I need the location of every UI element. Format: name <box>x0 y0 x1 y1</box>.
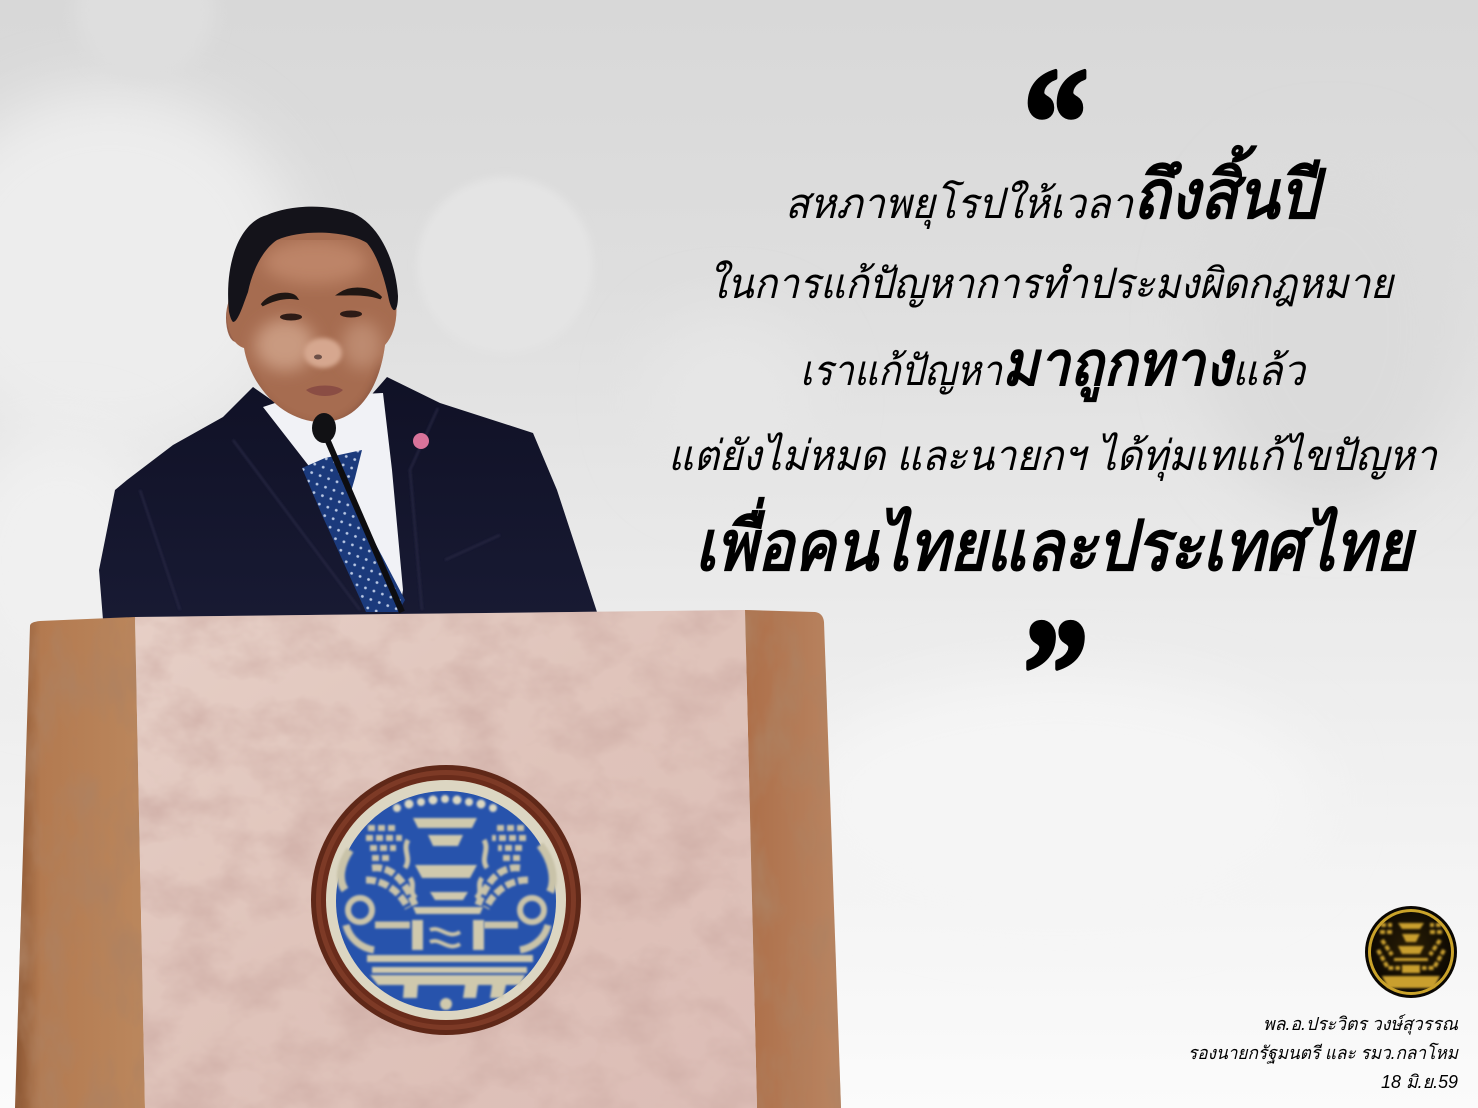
line 3: มาถูกทาง <box>1002 330 1236 403</box>
shirt collar <box>263 393 403 608</box>
date: 18 มิ.ย.59 <box>1381 1072 1458 1092</box>
line 4: แต่ยังไม่หมด และนายกฯ ได้ทุ่มเทแก้ไขปัญหา <box>668 432 1438 481</box>
lapel pin <box>413 433 429 449</box>
line 1: สหภาพยุโรปให้เวลา <box>785 180 1134 229</box>
microphone <box>312 413 402 612</box>
wood grain <box>10 605 850 1108</box>
seal lions <box>341 828 553 950</box>
podium seal <box>311 765 581 1035</box>
line 2: ในการแก้ปัญหาการทำประมงผิดกฎหมาย <box>708 260 1395 308</box>
speaker title: รองนายกรัฐมนตรี และ รมว.กลาโหม <box>1188 1042 1459 1064</box>
speaker name: พล.อ.ประวิตร วงษ์สุวรรณ <box>1263 1014 1458 1035</box>
line 1: ถึงสิ้นปี <box>1133 144 1327 233</box>
line 1 <box>785 144 1327 233</box>
hair <box>228 207 398 322</box>
necktie <box>302 450 405 612</box>
closing quotation mark: ” <box>1023 587 1089 759</box>
office emblem <box>1365 906 1457 998</box>
podium right side <box>745 610 841 1108</box>
speaker <box>99 207 597 620</box>
opening quotation mark: “ <box>1023 36 1089 208</box>
line 3 <box>800 330 1307 403</box>
line 3: เราแก้ปัญหา <box>800 347 1003 395</box>
quote text <box>668 144 1438 585</box>
jacket lapel shading <box>140 408 500 610</box>
podium <box>10 605 850 1108</box>
podium front panel <box>135 610 757 1108</box>
credit text <box>1188 1014 1459 1092</box>
jacket <box>99 377 597 620</box>
neck and face <box>226 232 396 422</box>
podium left side <box>15 617 145 1108</box>
line 3: แล้ว <box>1232 347 1307 394</box>
